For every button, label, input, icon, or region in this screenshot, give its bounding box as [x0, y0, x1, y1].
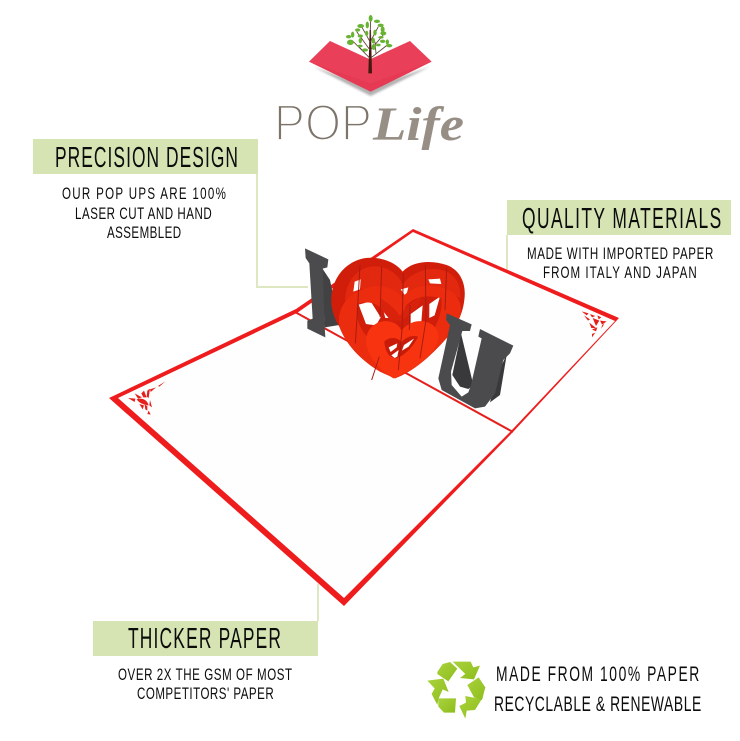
card red border	[109, 229, 619, 606]
pop-up letter U	[438, 313, 513, 408]
logo wordmark: POP: POP	[274, 94, 372, 151]
heading bar	[93, 621, 318, 656]
heart vertical slits	[355, 265, 447, 380]
description	[118, 666, 292, 704]
front heart opening	[384, 336, 418, 358]
U front face	[438, 313, 513, 408]
logo icon: open book with tree	[309, 15, 432, 96]
heading: THICKER PAPER	[128, 623, 281, 655]
white openings	[353, 279, 441, 325]
description: COMPETITORS' PAPER	[137, 685, 274, 704]
heading bar	[33, 139, 258, 174]
recycling statement	[494, 662, 701, 716]
description: OUR POP UPS ARE 100%	[62, 185, 226, 204]
middle heart	[339, 286, 461, 378]
pop-up card base	[109, 229, 619, 606]
heading: PRECISION DESIGN	[55, 142, 238, 174]
heading: QUALITY MATERIALS	[522, 203, 721, 235]
pop-up 3D heart	[331, 258, 465, 380]
pop-up letter I	[305, 248, 339, 337]
U back face	[452, 333, 507, 402]
callout: thicker paper	[93, 621, 318, 704]
recycling statement: MADE FROM 100% PAPER	[496, 662, 699, 686]
back heart	[331, 258, 465, 378]
front heart	[366, 321, 438, 378]
corner ornament left	[128, 381, 165, 415]
description	[527, 245, 713, 283]
connector lines	[257, 174, 507, 621]
logo: Pop Life	[274, 15, 464, 151]
description: FROM ITALY AND JAPAN	[543, 264, 697, 283]
callout: quality materials	[507, 200, 731, 283]
corner ornament right	[582, 311, 607, 337]
icon: recycling symbol	[427, 662, 485, 719]
description: LASER CUT AND HAND	[75, 205, 212, 224]
description: MADE WITH IMPORTED PAPER	[527, 245, 713, 264]
card fold line	[295, 312, 513, 432]
front heart opening white stripes	[389, 339, 414, 358]
card white interior	[118, 232, 615, 598]
recycling statement: RECYCLABLE & RENEWABLE	[494, 692, 701, 716]
description	[62, 185, 226, 243]
inner slices	[380, 297, 422, 321]
logo wordmark: Life: Life	[372, 98, 464, 151]
callout: precision design	[33, 139, 258, 243]
back heart upper band	[345, 266, 460, 302]
heading bar	[507, 200, 731, 235]
description: OVER 2X THE GSM OF MOST	[118, 666, 292, 685]
description: ASSEMBLED	[107, 224, 181, 243]
